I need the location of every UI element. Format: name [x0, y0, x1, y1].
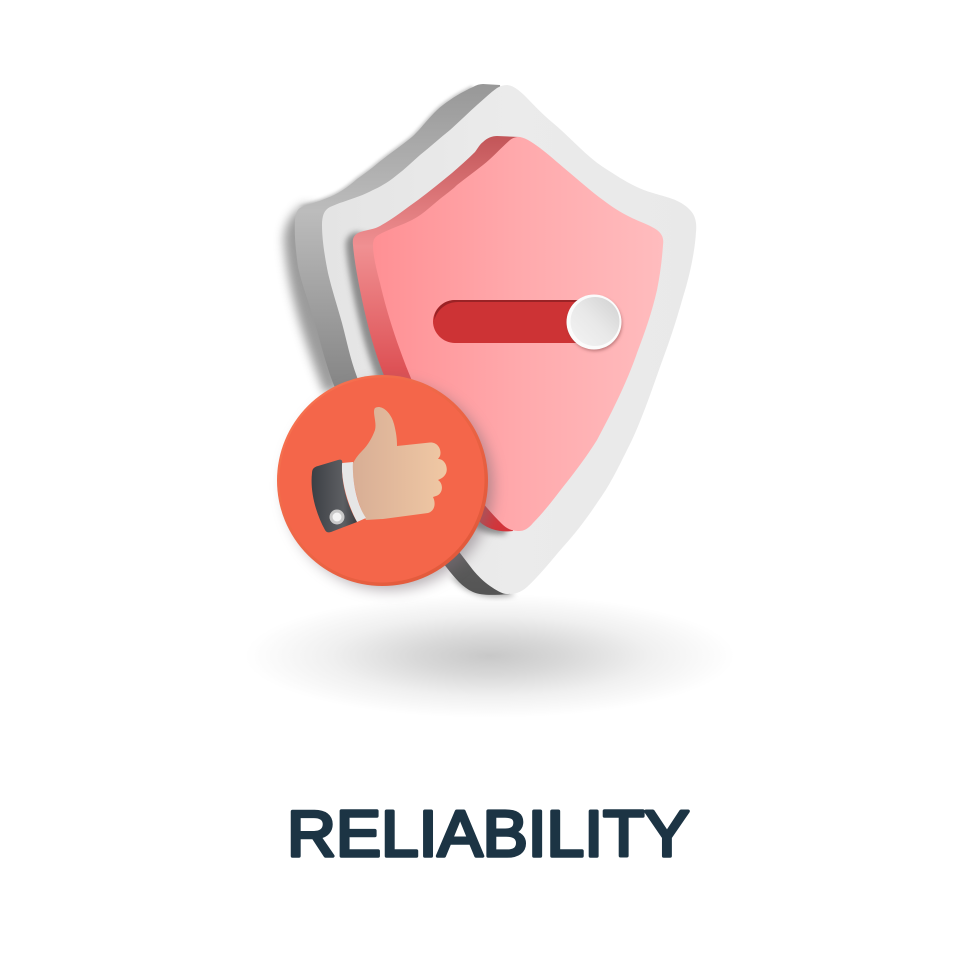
- floor shadow: [245, 594, 735, 718]
- badge: drop shadow: [285, 382, 493, 590]
- shield: soft cast shadow at bottom: [450, 575, 515, 597]
- shield: white front plate: [322, 85, 696, 594]
- shield icon: [284, 84, 696, 597]
- pink shield: shadow on plate: [346, 203, 523, 534]
- badge: thumbs up: [277, 375, 493, 590]
- icon: cuff button: [330, 510, 344, 524]
- icon: hand: [353, 407, 447, 520]
- title: RELIABILITY: [287, 797, 690, 870]
- pink shield: front face: [373, 137, 663, 531]
- badge: orange disc: [277, 375, 488, 586]
- shield: soft edge along top: [299, 86, 479, 214]
- pink shield: dark side wall: [353, 136, 530, 531]
- shield: soft cast shadow at left: [284, 205, 339, 392]
- toggle: track inner shadow: [434, 300, 600, 320]
- icon: jacket sleeve: [312, 460, 357, 532]
- toggle: red track: [433, 300, 600, 343]
- shield: grey side wall: [295, 84, 520, 595]
- toggle switch: [433, 294, 622, 351]
- icon: shirt cuff: [342, 462, 366, 522]
- toggle: knob: [566, 294, 622, 351]
